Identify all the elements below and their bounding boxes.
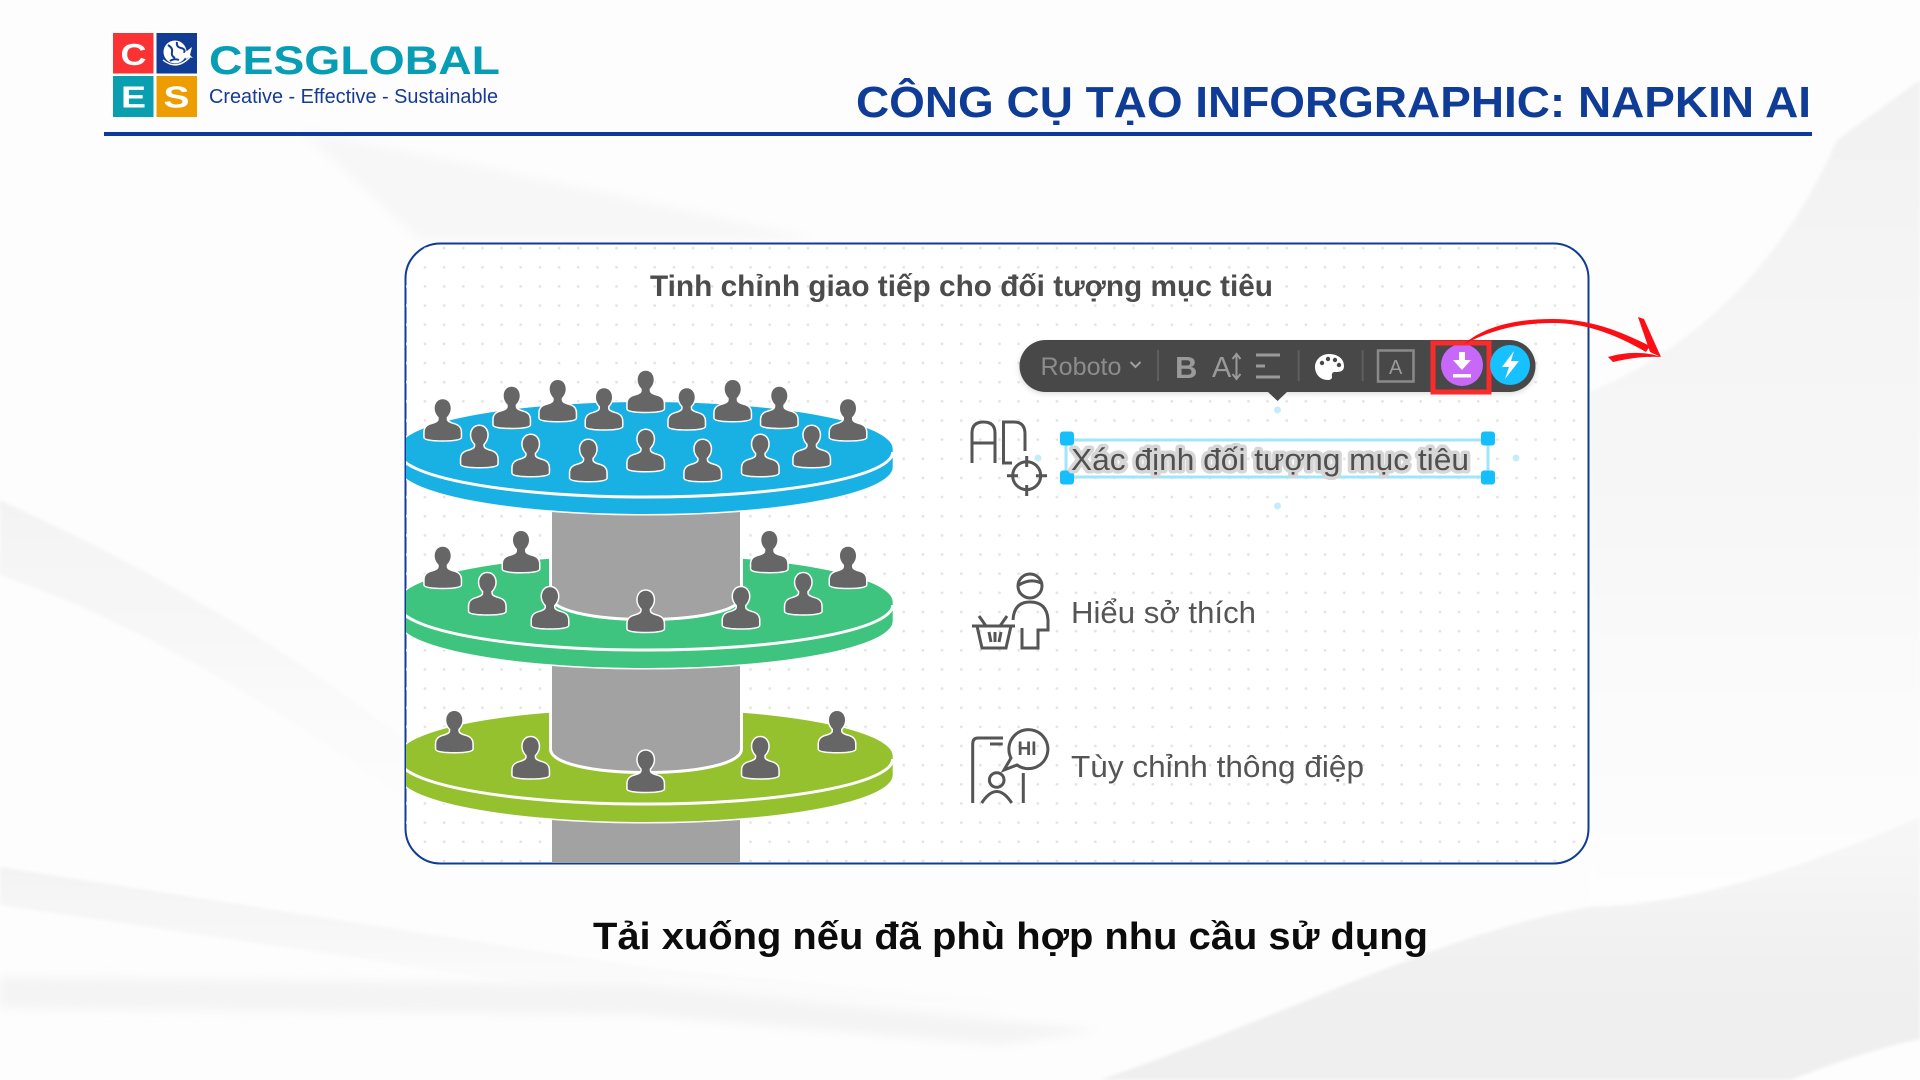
toolbar bold: B bbox=[1175, 350, 1197, 385]
caption: Tải xuống nếu đã phù hợp nhu cầu sử dụng bbox=[593, 916, 1428, 958]
tiered disc chart bbox=[399, 371, 893, 865]
item text: message: Tùy chỉnh thông điệp bbox=[1071, 749, 1364, 784]
logo mark: E tile bbox=[113, 76, 154, 117]
arrow bbox=[1463, 317, 1661, 362]
toolbar align bbox=[1256, 355, 1280, 377]
title: CÔNG CỤ TẠO INFORGRAPHIC: NAPKIN AI bbox=[856, 76, 1811, 127]
logo bbox=[113, 33, 500, 117]
toolbar chevron bbox=[1130, 362, 1140, 367]
logo mark: C tile: C bbox=[120, 37, 146, 72]
download highlight bbox=[1433, 343, 1489, 392]
download button bbox=[1441, 344, 1483, 386]
toolbar bbox=[1020, 340, 1536, 401]
pillar: middle bbox=[552, 660, 740, 771]
icon: person with basket bbox=[972, 574, 1048, 648]
toolbar palette bbox=[1315, 354, 1344, 380]
logo mark: S tile: S bbox=[164, 80, 190, 114]
toolbar font label: Roboto bbox=[1040, 353, 1122, 381]
disc: lime tier bbox=[399, 709, 893, 822]
toolbar text box: A bbox=[1389, 357, 1403, 379]
logo mark: C tile bbox=[113, 33, 154, 74]
persons: green tier bbox=[425, 531, 866, 632]
item text: audience: Xác định đối tượng mục tiêu bbox=[1071, 442, 1469, 477]
disc: blue tier bbox=[399, 402, 893, 514]
lightning button bbox=[1490, 345, 1530, 385]
pillar: top bbox=[552, 505, 740, 618]
selected item: selection frame bbox=[1034, 406, 1520, 510]
item text: interests: Hiểu sở thích bbox=[1071, 595, 1256, 630]
toolbar text size bbox=[1212, 352, 1240, 384]
logo mark: globe tile bbox=[156, 33, 197, 74]
logo mark: S tile bbox=[156, 76, 197, 117]
persons: blue tier bbox=[425, 371, 866, 481]
toolbar separators bbox=[1158, 350, 1363, 381]
icon: AD target bbox=[972, 422, 1047, 496]
toolbar text size: A bbox=[1212, 352, 1232, 384]
logo tagline: Creative - Effective - Sustainable bbox=[209, 86, 498, 108]
persons: lime tier bbox=[436, 711, 855, 792]
header rule bbox=[104, 132, 1812, 136]
bubble label: HI bbox=[1018, 739, 1036, 760]
disc: green tier bbox=[399, 555, 893, 668]
toolbar text box bbox=[1378, 350, 1414, 382]
pillar: bottom bbox=[552, 820, 740, 863]
logo mark: E tile: E bbox=[121, 80, 146, 114]
logo wordmark: CESGLOBAL bbox=[209, 39, 500, 83]
panel: target audience infographic bbox=[399, 244, 1589, 865]
icon: phone with speech bubble bbox=[973, 730, 1048, 803]
panel heading: Tinh chỉnh giao tiếp cho đối tượng mục tiêu bbox=[650, 270, 1273, 303]
